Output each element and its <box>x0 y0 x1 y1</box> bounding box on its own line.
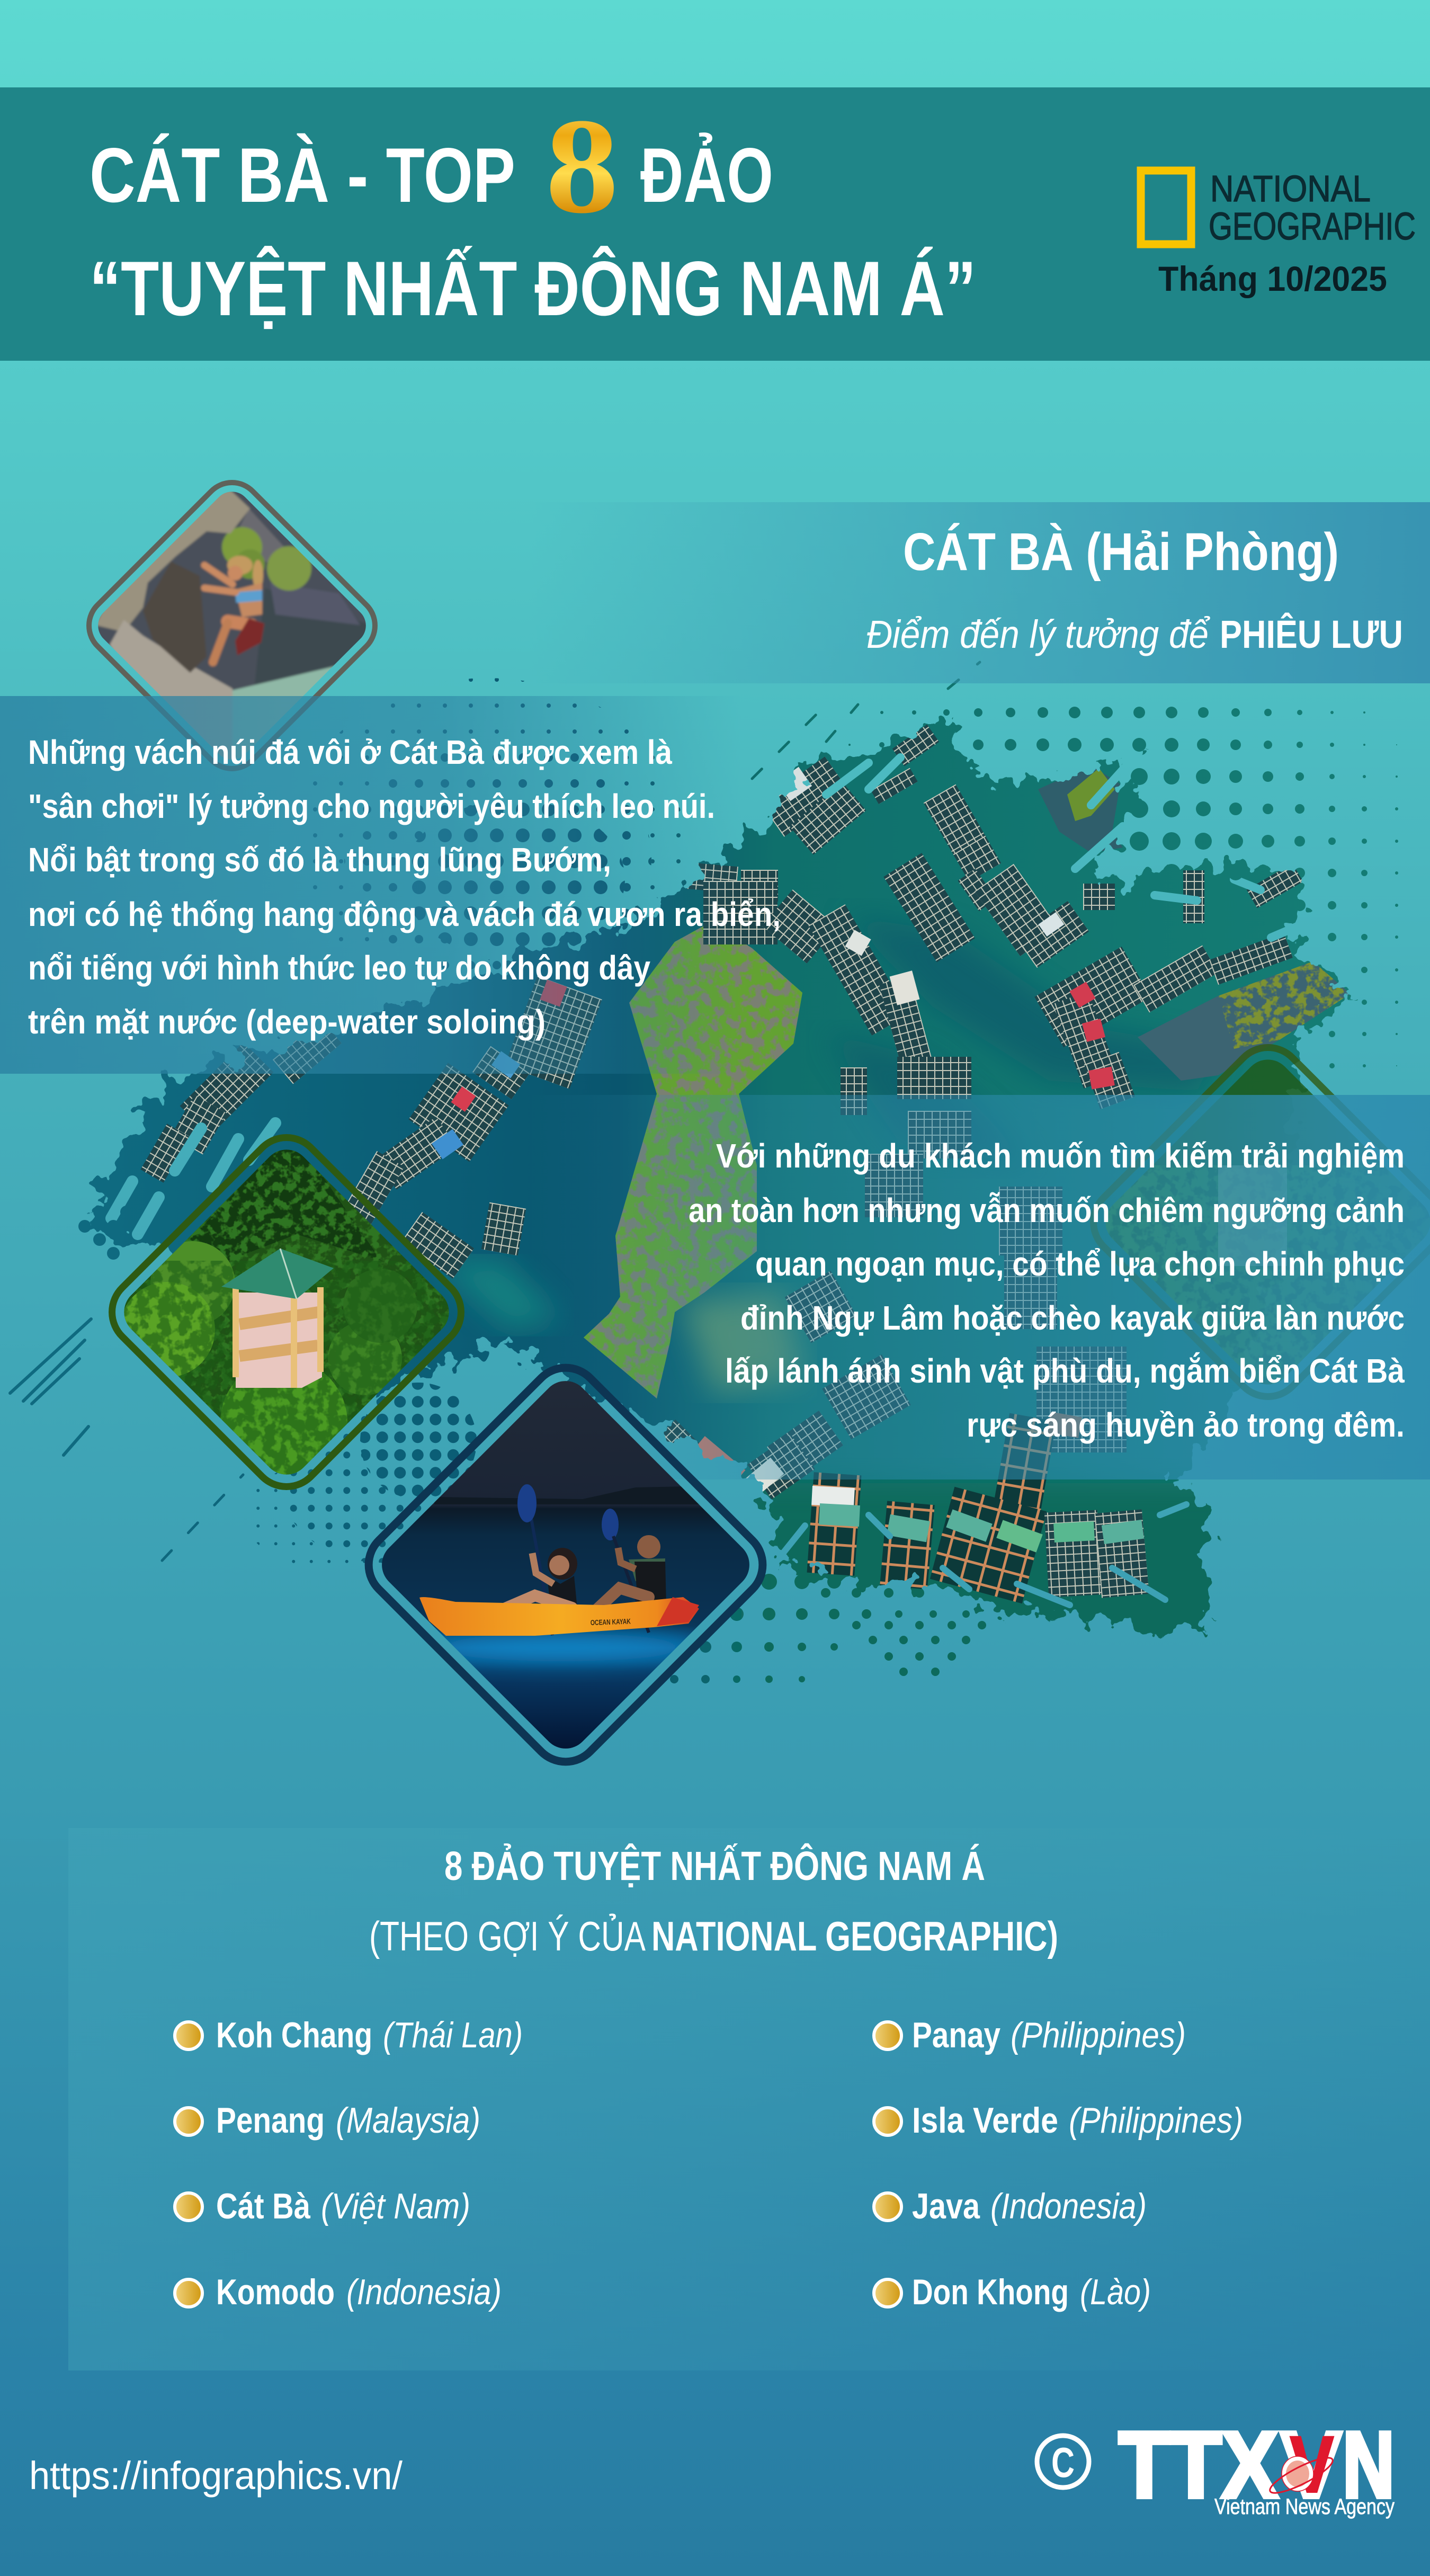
main limestone island <box>584 922 802 1398</box>
diamond photo: rock climber <box>86 480 378 771</box>
TTXVN logo: N <box>1343 2412 1395 2517</box>
date: Tháng 10/2025 <box>1158 259 1387 298</box>
item: Isla Verde <box>874 2100 1243 2141</box>
text block: climbing paragraph: "sân chơi" lý tưởng cho người yêu thích leo núi. <box>28 787 715 825</box>
subheading: adventure destination <box>866 612 1403 656</box>
item: Komodo: Komodo <box>216 2272 335 2312</box>
text block: climbing paragraph <box>28 733 781 1041</box>
subheading: adventure destination: Điểm đến lý tưởng để <box>866 612 1211 656</box>
diamond photo: Ngự Lâm watchtower <box>98 1124 475 1501</box>
copyright icon <box>1037 2436 1089 2488</box>
text block: climbing paragraph: Nổi bật trong số đó là thung lũng Bướm, <box>28 841 611 879</box>
TTXVN logo: V <box>1290 2420 1334 2509</box>
subheading: adventure destination: PHIÊU LƯU <box>1220 612 1403 656</box>
item: Cát Bà <box>175 2186 470 2226</box>
panel: title backdrop <box>530 502 1430 683</box>
National Geographic logo <box>1141 168 1416 248</box>
item: Penang: (Malaysia) <box>336 2100 480 2141</box>
kayak brand text: OCEAN KAYAK <box>591 1617 631 1627</box>
TTXVN logo: TTX <box>1119 2412 1278 2517</box>
fish farm rafts <box>140 725 1303 1603</box>
item: Komodo <box>175 2272 502 2312</box>
golden number 8: 8 <box>546 90 619 242</box>
item: Penang: Penang <box>216 2100 325 2141</box>
header band <box>0 87 1430 361</box>
item: Isla Verde: Isla Verde <box>912 2100 1058 2141</box>
item: Isla Verde: (Philippines) <box>1069 2100 1243 2141</box>
title line 2: “TUYỆT NHẤT ĐÔNG NAM Á” <box>90 245 976 332</box>
heading: Cát Bà: CÁT BÀ (Hải Phòng) <box>903 522 1339 582</box>
item: Cát Bà: (Việt Nam) <box>321 2186 470 2226</box>
diamond photo: night kayak <box>354 1353 777 1776</box>
item: Java: Java <box>912 2186 980 2226</box>
text block: kayak paragraph <box>689 1137 1405 1444</box>
panel: right text backdrop <box>530 1095 1430 1479</box>
item: Panay: Panay <box>912 2015 1000 2055</box>
item: Panay <box>874 2015 1186 2055</box>
title line 1: CÁT BÀ - TOP <box>90 132 515 218</box>
panel: 8 islands list <box>68 1828 1430 2370</box>
item: Cát Bà: Cát Bà <box>216 2186 310 2226</box>
National Geographic logo: NATIONAL <box>1210 168 1371 209</box>
title line 1 <box>90 90 773 242</box>
footer url: https://infographics.vn/ <box>29 2454 403 2498</box>
text block: climbing paragraph: Những vách núi đá vôi ở Cát Bà được xem là <box>28 733 672 771</box>
TTXVN logo: V <box>1281 2412 1342 2517</box>
item: Koh Chang <box>175 2015 523 2055</box>
list subheading <box>369 1913 1058 1959</box>
text block: climbing paragraph: nơi có hệ thống hang động và vách đá vươn ra biển, <box>28 895 781 933</box>
item: Don Khong: (Lào) <box>1080 2272 1151 2312</box>
item: Don Khong: Don Khong <box>912 2272 1069 2312</box>
TTXVN logo <box>1119 2412 1395 2519</box>
ghost tower ring <box>1079 1033 1430 1411</box>
item: Koh Chang: Koh Chang <box>216 2015 372 2055</box>
item: Penang <box>175 2100 480 2141</box>
list subheading: (THEO GỢI Ý CỦA <box>369 1913 646 1959</box>
item: Java: (Indonesia) <box>990 2186 1147 2226</box>
small karst rock <box>1038 765 1123 853</box>
item: Java <box>874 2186 1147 2226</box>
item: Panay: (Philippines) <box>1011 2015 1186 2055</box>
copyright icon: C <box>1051 2439 1075 2486</box>
title line 1: ĐẢO <box>640 132 773 218</box>
list subheading: NATIONAL GEOGRAPHIC) <box>651 1913 1058 1959</box>
list heading: 8 ĐẢO TUYỆT NHẤT ĐÔNG NAM Á <box>444 1842 985 1889</box>
right rock island <box>1138 961 1351 1081</box>
text block: climbing paragraph: trên mặt nước (deep-water soloing) <box>28 1003 546 1041</box>
ghost tower photo under right panel <box>1106 1059 1430 1385</box>
aerial photo of Cát Bà bay in splash mask <box>8 661 1398 1683</box>
text block: climbing paragraph: nổi tiếng với hình thức leo tự do không dây <box>28 949 650 987</box>
agency name: Vietnam News Agency <box>1214 2494 1395 2519</box>
item: Koh Chang: (Thái Lan) <box>383 2015 523 2055</box>
item: Komodo: (Indonesia) <box>346 2272 502 2312</box>
panel: climbing text backdrop <box>0 696 741 1074</box>
